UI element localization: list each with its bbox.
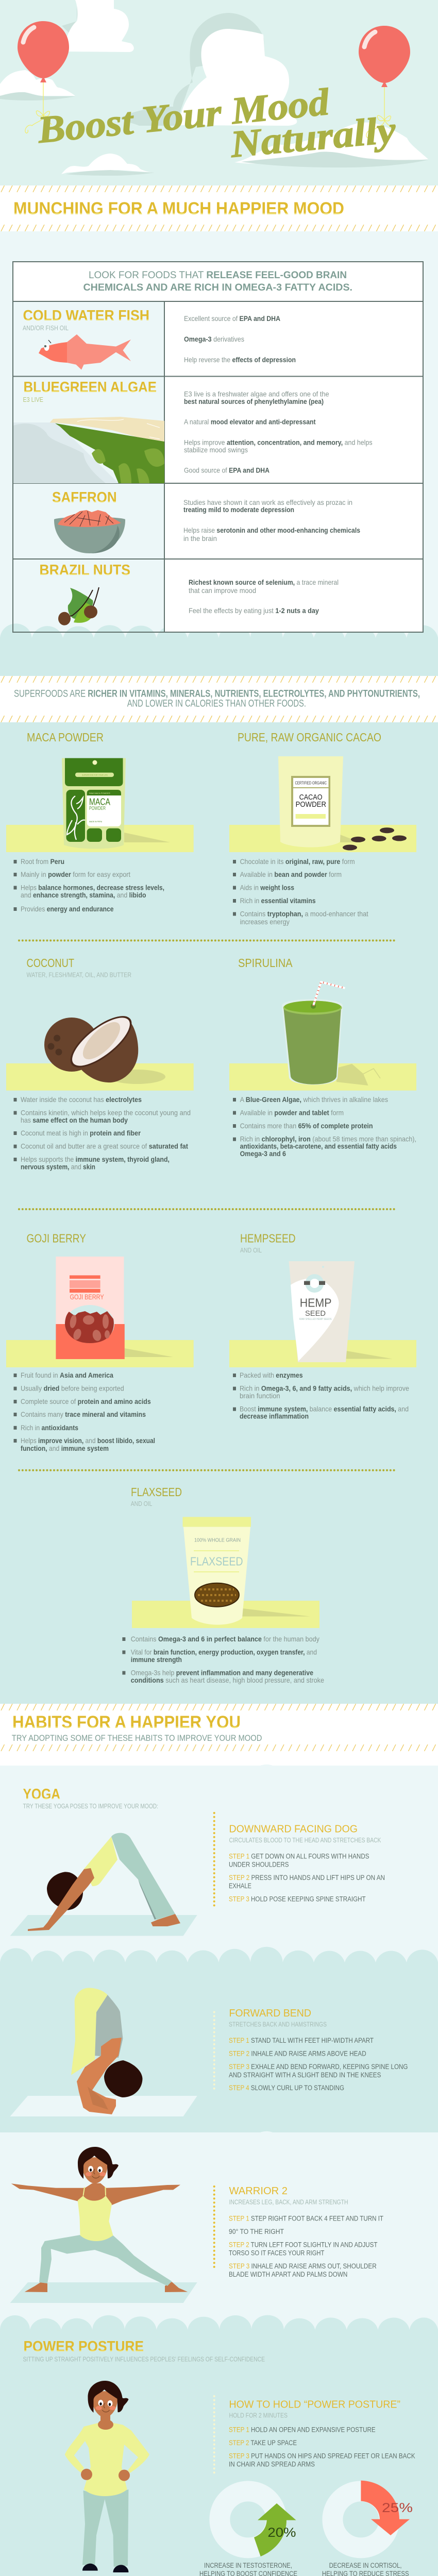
bullet list: cacao: Contains tryptophan, a mood-enhancer that [240,910,368,918]
bullet list: goji: Usually dried before being exported [21,1384,124,1393]
donut chart: cortisol 25% [322,2481,413,2576]
icon: cacao pack [278,756,360,847]
superfoods intro text [14,688,420,709]
row: saffron: SAFFRON [52,489,117,506]
table intro text: CHEMICALS AND ARE RICH IN OMEGA-3 FATTY ACIDS. [83,282,352,293]
steps: power posture [229,2399,415,2468]
row: bluegreen algae: Helps improve attention, concentration, and memory, and helps [184,438,373,446]
steps: warrior 2: INCREASES LEG, BACK, AND ARM STRENGTH [229,2199,348,2206]
panel: hempseed: AND OIL [240,1247,262,1254]
icon: cacao beans [343,827,407,850]
bullet list: coconut: Helps supports the immune system, thyroid gland, [21,1155,170,1163]
icon: maca pack: MACA [89,797,110,807]
steps: downward dog: STEP 3 HOLD POSE KEEPING SPINE STRAIGHT [229,1895,366,1903]
panel: coconut: COCONUT [27,956,74,970]
donut chart: cortisol 25%: 25% [382,2501,413,2515]
panel: raw organic cacao: PURE, RAW ORGANIC CACAO [238,731,381,744]
bullet list: maca: and enhance strength, stamina, and libido [21,891,146,899]
row: cold water fish: AND/OR FISH OIL [23,325,69,332]
panel: maca powder: MACA POWDER [27,731,104,744]
steps: warrior 2: STEP 3 INHALE AND RAISE ARMS OUT, SHOULDER [229,2262,377,2270]
section heading: habits: HABITS FOR A HAPPIER YOU [12,1713,241,1732]
bullet list: hemp [233,1371,409,1420]
steps: downward dog: STEP 2 PRESS INTO HANDS AND LIFT HIPS UP ON AN [229,1874,385,1882]
panel: flaxseed: AND OIL [131,1500,153,1507]
icon: maca pack: MADE IN PERU [89,821,103,823]
hero clouds [0,0,428,176]
icon: flaxseed bag: 100% WHOLE GRAIN [194,1537,241,1544]
row: saffron: in the brain [183,534,217,543]
icon: coconut [44,1007,165,1084]
bullet list: cacao [233,857,368,926]
bullet list: flaxseed: Contains Omega-3 and 6 in perfect balance for the human body [131,1635,319,1643]
donut chart: testosterone 20% [199,2491,297,2576]
steps: forward bend: STEP 1 STAND TALL WITH FEET HIP-WIDTH APART [229,2037,374,2044]
row: cold water fish: Help reverse the effects of depression [184,355,296,364]
steps: warrior 2: TORSO SO IT FACES YOUR RIGHT [229,2249,324,2257]
steps: power posture: HOW TO HOLD “POWER POSTURE” [229,2399,400,2410]
bullet list: cacao: Rich in essential vitamins [240,896,316,905]
icon: hemp seed bag [289,1261,393,1362]
row: cold water fish: Excellent source of EPA and DHA [184,314,280,323]
bullet list: spirulina: Rich in chlorophyl, iron (about 58 times more than spinach), [240,1135,416,1143]
row: bluegreen algae: E3 LIVE [23,396,43,403]
donut chart: testosterone 20%: 20% [267,2526,296,2540]
icon: saffron bowl [54,510,125,553]
panel: flaxseed [122,1485,324,1684]
panel: coconut: WATER, FLESH/MEAT, OIL, AND BUTTER [27,972,131,979]
bullet list: goji: Rich in antioxidants [21,1423,78,1432]
steps: warrior 2 [229,2185,383,2278]
steps: power posture: IN CHAIR AND SPREAD ARMS [229,2461,315,2468]
steps: forward bend [229,2008,408,2092]
icon: flaxseed bag: FLAXSEED [190,1555,243,1568]
bullet list: coconut: has same effect on the human body [21,1116,128,1124]
row: bluegreen algae: BLUEGREEN ALGAE [24,379,157,396]
row: bluegreen algae: E3 live is a freshwater algae and offers one of the [184,389,329,398]
bullet list: goji: Helps improve vision, and boost libido, sexual [21,1436,155,1445]
steps: downward dog: CIRCULATES BLOOD TO THE HEAD AND STRETCHES BACK [229,1837,381,1844]
bullet list: maca: Mainly in powder form for easy export [21,870,130,878]
icon: goji berry pack [56,1257,173,1359]
steps: forward bend: AND STRAIGHT WITH A SLIGHT BEND IN THE KNEES [229,2071,381,2079]
bullet list: goji: Fruit found in Asia and America [21,1371,113,1379]
row: bluegreen algae: A natural mood elevator and anti-depressant [184,417,316,426]
steps: forward bend: STRETCHES BACK AND HAMSTRINGS [229,2021,327,2028]
row: saffron: Studies have shown it can work as effectively as prozac in [183,498,352,506]
row: cold water fish [23,308,296,370]
steps: downward dog: DOWNWARD FACING DOG [229,1824,358,1835]
bullet list: goji: Contains many trace mineral and vitamins [21,1410,146,1418]
illustration: woman standing in power posture [65,2381,149,2572]
panel: spirulina: SPIRULINA [238,956,293,970]
power posture heading: SITTING UP STRAIGHT POSITIVELY INFLUENCES PEOPLES' FEELINGS OF SELF-CONFIDENCE [23,2355,265,2363]
row: brazil nuts: Feel the effects by eating just 1-2 nuts a day [189,606,319,615]
steps: downward dog [229,1824,385,1903]
icon: hemp seed bag: RAW SHELLED HEMP SEEDS [299,1318,332,1321]
icon: cacao pack: CERTIFIED ORGANIC [295,781,327,786]
icon: maca pack: SUPERFOOD FOR YOUR LIFE [82,774,108,776]
bullet list: coconut [13,1095,191,1171]
main title [36,81,398,166]
bullet list: hemp: Rich in Omega-3, 6, and 9 fatty acids, which help improve [240,1384,409,1393]
bullet list: hemp: decrease inflammation [240,1412,309,1420]
steps: warrior 2: STEP 2 TURN LEFT FOOT SLIGHTLY IN AND ADJUST [229,2241,377,2248]
icon: maca pack [62,758,170,849]
bullet list: maca [13,857,164,913]
icon: cacao pack: POWDER [296,800,326,809]
row: brazil nuts: BRAZIL NUTS [39,562,130,579]
bullet list: spirulina: Contains more than 65% of complete protein [240,1122,373,1130]
illustration: downward dog [10,1833,197,1936]
power posture heading: POWER POSTURE [24,2338,144,2355]
bullet list: goji: function, and immune system [21,1444,109,1452]
icon: flaxseed bag [182,1517,310,1625]
icon: maca pack: RAW MACA POWDER [89,792,110,794]
yoga heading: TRY THESE YOGA POSES TO IMPROVE YOUR MOOD: [23,1803,158,1810]
steps: power posture: STEP 1 HOLD AN OPEN AND EXPANSIVE POSTURE [229,2426,376,2434]
bullet list: coconut: Contains kinetin, which helps keep the coconut young and [21,1109,191,1117]
row: brazil nuts [39,562,339,625]
bullet list: cacao: Chocolate in its original, raw, pure form [240,857,355,866]
panel: goji berry [6,1232,194,1452]
panel: goji berry: GOJI BERRY [27,1232,86,1245]
bullet list: maca: Provides energy and endurance [21,905,114,913]
bullet list: flaxseed [122,1635,324,1684]
bullet list: coconut: Water inside the coconut has electrolytes [21,1095,142,1104]
bullet list: cacao: Available in bean and powder form [240,870,342,878]
bullet list: flaxseed: immune strength [131,1655,182,1664]
row: bluegreen algae: stabilize mood swings [184,446,248,454]
panel: flaxseed: FLAXSEED [131,1485,182,1499]
steps: warrior 2: BLADE WIDTH APART AND PALMS DOWN [229,2270,347,2278]
panel: forward bend [10,1988,408,2116]
bullet list: cacao: increases energy [240,918,290,926]
steps: power posture: STEP 2 TAKE UP SPACE [229,2439,297,2447]
bullet list: coconut: nervous system, and skin [21,1163,95,1171]
bullet list: spirulina [233,1095,416,1158]
steps: downward dog: UNDER SHOULDERS [229,1861,289,1868]
icon: cacao pack: CACAO [299,793,323,802]
bullet list: maca: Root from Peru [21,857,64,866]
icon: hemp seed bag: SEED [305,1309,326,1318]
food table [13,262,423,632]
icon: hemp seed bag: HEMP [300,1296,332,1310]
bullet list: flaxseed: conditions such as heart disease, high blood pressure, and stroke [131,1676,324,1684]
row: cold water fish: Omega-3 derivatives [184,335,244,343]
main title: Boost Your Mood [36,81,331,151]
panel: coconut [6,956,194,1171]
steps: warrior 2: 90° TO THE RIGHT [229,2228,284,2235]
row: saffron: treating mild to moderate depression [183,505,294,514]
illustration: warrior 2 [10,2147,197,2303]
steps: downward dog: EXHALE [229,1882,251,1890]
steps: downward dog: STEP 1 GET DOWN ON ALL FOURS WITH HANDS [229,1853,369,1860]
bullet list: hemp: Boost immune system, balance essential fatty acids, and [240,1405,409,1413]
icon: goji berry pack: GOJI BERRY [70,1293,104,1301]
bullet list: spirulina: antioxidants, beta-carotene, and essential fatty acids [240,1142,397,1150]
bullet list: spirulina: A Blue-Green Algae, which thrives in alkaline lakes [240,1095,388,1104]
row: cold water fish: COLD WATER FISH [23,308,149,324]
row: brazil nuts: Richest known source of selenium, a trace mineral [189,578,339,586]
steps: warrior 2: WARRIOR 2 [229,2185,288,2197]
bullet list: maca: Helps balance hormones, decrease stress levels, [21,883,164,891]
power posture heading [23,2338,265,2363]
donut chart: testosterone 20%: INCREASE IN TESTOSTERONE, [204,2562,292,2569]
panel: power posture [23,2338,415,2576]
bullet list: goji [13,1371,155,1452]
icon: brazil nuts [58,587,99,625]
row: bluegreen algae: Good source of EPA and DHA [184,466,269,474]
yoga heading [23,1786,158,1810]
row: saffron: Helps raise serotonin and other mood-enhancing chemicals [183,526,360,534]
steps: forward bend: STEP 2 INHALE AND RAISE ARMS ABOVE HEAD [229,2050,366,2058]
steps: forward bend: STEP 3 EXHALE AND BEND FORWARD, KEEPING SPINE LONG [229,2063,408,2071]
bullet list: cacao: Aids in weight loss [240,883,294,891]
bullet list: hemp: Packed with enzymes [240,1371,303,1379]
row: bluegreen algae [13,379,373,483]
donut chart: cortisol 25%: DECREASE IN CORTISOL, [329,2562,402,2569]
superfoods intro text: AND LOWER IN CALORIES THAN OTHER FOODS. [127,699,306,709]
icon: maca pack: POWDER [89,806,106,811]
panel: warrior 2 [10,2147,383,2303]
illustration: algae on shore [13,417,164,483]
steps: forward bend: STEP 4 SLOWLY CURL UP TO STANDING [229,2084,344,2092]
balloon left [18,21,69,133]
bullet list: coconut: Coconut oil and butter are a great source of saturated fat [21,1142,188,1150]
section heading: habits [12,1713,262,1743]
bullet list: goji: Complete source of protein and amino acids [21,1397,151,1405]
yoga heading: YOGA [23,1786,60,1803]
row: saffron [52,489,360,553]
bullet list: flaxseed: Vital for brain function, energy production, oxygen transfer, and [131,1648,317,1656]
bullet list: flaxseed: Omega-3s help prevent inflammation and many degenerative [131,1668,313,1676]
bullet list: hemp: brain function [240,1392,280,1400]
steps: forward bend: FORWARD BEND [229,2008,311,2019]
panel: hempseed: HEMPSEED [240,1232,296,1245]
steps: power posture: HOLD FOR 2 MINUTES [229,2412,288,2419]
panel: spirulina [229,956,416,1158]
table intro text: LOOK FOR FOODS THAT RELEASE FEEL-GOOD BRAIN [89,270,347,281]
icon: fish [39,334,131,370]
panel: maca powder [6,731,194,913]
bullet list: spirulina: Omega-3 and 6 [240,1149,286,1158]
section heading: munching: MUNCHING FOR A MUCH HAPPIER MOOD [13,199,344,218]
bullet list: spirulina: Available in powder and tablet form [240,1109,344,1117]
bullet list: coconut: Coconut meat is high in protein and fiber [21,1129,141,1137]
illustration: forward bend [10,1988,197,2116]
balloon right [359,26,410,138]
main title: Naturally [228,109,398,166]
steps: warrior 2: STEP 1 STEP RIGHT FOOT BACK 4 FEET AND TURN IT [229,2214,383,2223]
icon: spirulina smoothie [282,982,380,1086]
panel: raw organic cacao [229,731,416,926]
row: bluegreen algae: best natural sources of phenylethylamine (pea) [184,397,324,405]
section heading: habits: TRY ADOPTING SOME OF THESE HABITS TO IMPROVE YOUR MOOD [12,1733,262,1743]
row: brazil nuts: that can improve mood [189,586,256,595]
table intro text [83,270,352,293]
steps: power posture: STEP 3 PUT HANDS ON HIPS AND SPREAD FEET OR LEAN BACK [229,2452,415,2460]
panel: yoga downward dog [10,1786,385,1936]
panel: hempseed [229,1232,416,1420]
